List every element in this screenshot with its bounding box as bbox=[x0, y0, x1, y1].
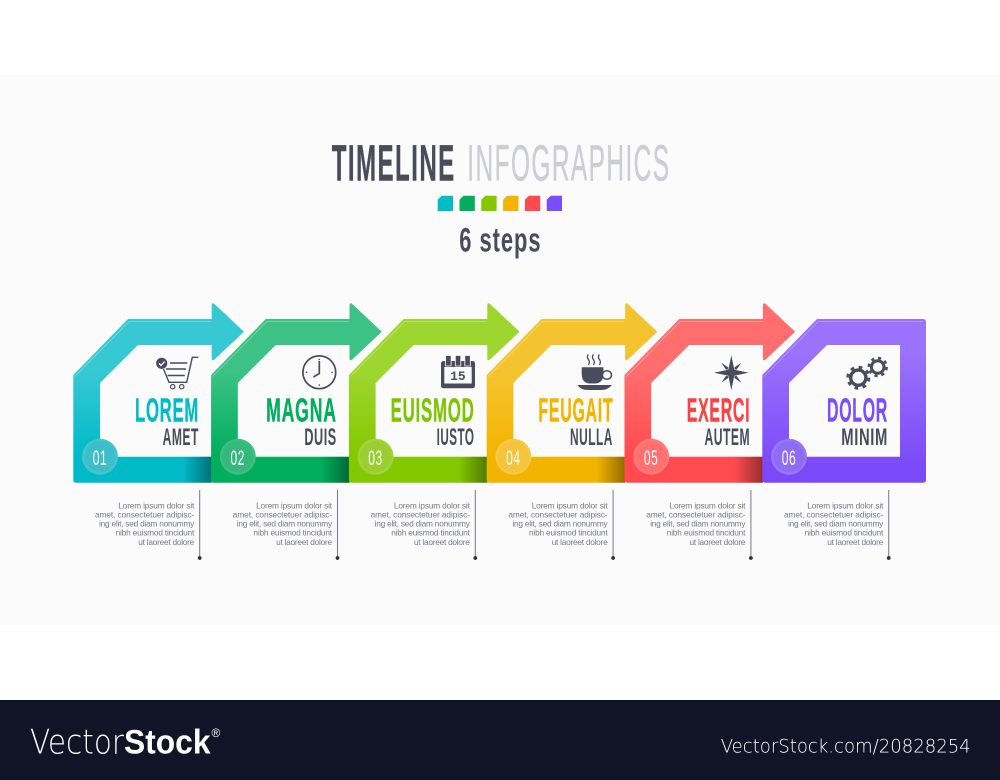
description text: ut laoreet dolore bbox=[690, 537, 746, 547]
leader line bbox=[198, 490, 202, 560]
frame shape 06 bbox=[762, 319, 926, 483]
panel: step 04 bbox=[487, 303, 657, 560]
description text: ing elit, sed diam nonummy bbox=[375, 519, 471, 529]
description text: amet, consectetuer adipisc- bbox=[371, 509, 470, 519]
description text bbox=[784, 500, 884, 547]
number badge 01: 01 bbox=[93, 446, 107, 470]
panel: step 02 bbox=[211, 303, 382, 560]
description text: ut laoreet dolore bbox=[138, 537, 195, 547]
description text: Lorem ipsum dolor sit bbox=[807, 500, 884, 510]
leader line bbox=[473, 490, 477, 560]
subheading: AUTEM bbox=[705, 424, 750, 451]
heading: LOREM bbox=[135, 392, 199, 429]
arrow shape 03 bbox=[349, 303, 520, 483]
description text: ut laoreet dolore bbox=[827, 537, 884, 547]
description text: nibh euismod tincidunt bbox=[805, 528, 884, 538]
colour key squares bbox=[438, 196, 562, 211]
subheading: AMET bbox=[163, 424, 199, 451]
leader line bbox=[749, 490, 753, 560]
description text: ing elit, sed diam nonummy bbox=[650, 519, 746, 529]
footer logo: Stock bbox=[124, 723, 211, 761]
number badge 05 bbox=[633, 439, 669, 475]
number badge 06 bbox=[771, 439, 807, 475]
panel: step 03: IUSTO bbox=[437, 424, 474, 451]
subheading: MINIM bbox=[841, 424, 888, 451]
panel: step 03 bbox=[349, 303, 520, 560]
description text: ing elit, sed diam nonummy bbox=[237, 519, 333, 529]
description text: amet, consectetuer adipisc- bbox=[233, 509, 332, 519]
description text bbox=[95, 500, 195, 547]
number badge 03: 03 bbox=[368, 446, 383, 470]
description text bbox=[233, 500, 333, 547]
number badge 02: 02 bbox=[230, 446, 245, 470]
description text: Lorem ipsum dolor sit bbox=[256, 500, 333, 510]
description text: nibh euismod tincidunt bbox=[116, 528, 195, 538]
description text: nibh euismod tincidunt bbox=[667, 528, 746, 538]
number badge 03 bbox=[358, 439, 394, 475]
arrow shape 05 bbox=[624, 303, 795, 483]
title: TIMELINE bbox=[332, 135, 456, 192]
number badge 04 bbox=[495, 439, 531, 475]
subheading: DUIS bbox=[304, 424, 337, 451]
description text: amet, consectetuer adipisc- bbox=[95, 509, 195, 519]
footer image id: VectorStock.com/20828254 bbox=[721, 736, 971, 758]
leader line bbox=[887, 490, 891, 560]
description text: ut laoreet dolore bbox=[552, 537, 608, 547]
description text: ut laoreet dolore bbox=[414, 537, 470, 547]
description text bbox=[646, 500, 746, 547]
footer bar bbox=[0, 700, 1000, 780]
arrow shape 02 bbox=[211, 303, 382, 483]
number badge 06: 06 bbox=[782, 446, 796, 470]
number badge 01 bbox=[82, 439, 118, 475]
number badge 02 bbox=[220, 439, 256, 475]
subtitle: 6 steps bbox=[459, 222, 542, 260]
heading: MAGNA bbox=[266, 392, 337, 429]
panel: step 04: FEUGAIT bbox=[538, 392, 613, 429]
panel: step 01 bbox=[73, 303, 244, 560]
description text: ing elit, sed diam nonummy bbox=[788, 519, 884, 529]
number badge 05: 05 bbox=[644, 446, 658, 470]
leader line bbox=[336, 490, 339, 560]
footer logo: ® bbox=[212, 726, 220, 740]
icon: compass star bbox=[713, 354, 750, 391]
description text: Lorem ipsum dolor sit bbox=[670, 500, 746, 510]
description text: ing elit, sed diam nonummy bbox=[99, 519, 195, 529]
icon: calendar bbox=[441, 356, 475, 388]
leader line bbox=[611, 490, 615, 560]
description text: nibh euismod tincidunt bbox=[529, 528, 608, 538]
panel: step 05: EXERCI bbox=[687, 392, 750, 429]
panel: step 06 bbox=[762, 319, 926, 560]
panel: step 04: NULLA bbox=[570, 424, 613, 451]
description text: Lorem ipsum dolor sit bbox=[532, 500, 608, 510]
description text bbox=[371, 500, 471, 547]
icon: clock bbox=[303, 356, 336, 389]
icon: shopping cart bbox=[156, 357, 198, 389]
footer logo: Vector bbox=[30, 722, 124, 762]
text: INFOGRAPHICS bbox=[467, 135, 670, 192]
description text: nibh euismod tincidunt bbox=[253, 528, 333, 538]
icon: calendar: 15 bbox=[450, 369, 466, 384]
description text: amet, consectetuer adipisc- bbox=[784, 509, 884, 519]
footer logo bbox=[30, 722, 220, 762]
description text: ut laoreet dolore bbox=[276, 537, 332, 547]
panel: step 05 bbox=[624, 303, 795, 560]
description text: amet, consectetuer adipisc- bbox=[646, 509, 746, 519]
panel: step 06: DOLOR bbox=[827, 392, 888, 429]
arrow shape 01 bbox=[73, 303, 244, 483]
icon: gears bbox=[848, 358, 887, 388]
number badge 04: 04 bbox=[506, 446, 521, 470]
description text: amet, consectetuer adipisc- bbox=[508, 509, 608, 519]
icon: coffee cup bbox=[577, 354, 612, 390]
description text: nibh euismod tincidunt bbox=[391, 528, 471, 538]
description text: Lorem ipsum dolor sit bbox=[394, 500, 471, 510]
description text: Lorem ipsum dolor sit bbox=[118, 500, 195, 510]
heading: EUISMOD bbox=[391, 392, 475, 429]
description text: ing elit, sed diam nonummy bbox=[512, 519, 609, 529]
arrow shape 04 bbox=[487, 303, 657, 483]
description text bbox=[508, 500, 609, 547]
